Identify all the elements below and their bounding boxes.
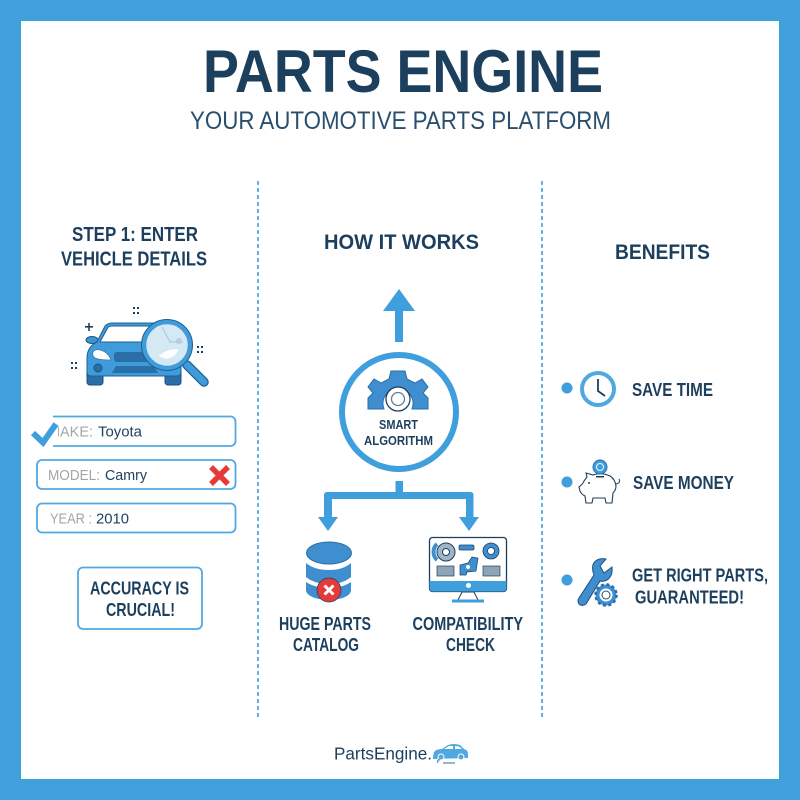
arrow: branch connector — [318, 481, 479, 531]
label: huge parts catalog: HUGE PARTS — [279, 613, 371, 634]
label: huge parts catalog — [279, 613, 371, 655]
icon: check mark — [33, 424, 56, 442]
callout: accuracy is crucial: ACCURACY IS — [90, 578, 189, 598]
subtitle: YOUR AUTOMOTIVE PARTS PLATFORM — [190, 107, 611, 135]
field: model — [37, 460, 236, 489]
benefit: save time — [562, 373, 713, 405]
smart algorithm circle: ALGORITHM — [364, 433, 433, 448]
benefit: save time: SAVE TIME — [632, 380, 713, 400]
field: year: YEAR : — [50, 510, 92, 528]
icon: gear — [368, 371, 428, 411]
benefit: save money: SAVE MONEY — [633, 473, 734, 493]
field: model: Camry — [105, 467, 147, 484]
heading: how it works: HOW IT WORKS — [324, 231, 479, 254]
icon: clock — [582, 373, 614, 405]
icon: red cross — [211, 467, 228, 484]
title: PARTS ENGINE — [203, 38, 603, 105]
field: make: MAKE: — [48, 424, 93, 440]
arrow: up — [383, 289, 415, 342]
icon: database — [306, 542, 352, 602]
icon: monitor with parts — [430, 538, 506, 602]
icon: car with magnifying glass — [71, 307, 204, 385]
heading: step 1: VEHICLE DETAILS — [61, 248, 207, 270]
field: year: 2010 — [96, 510, 129, 528]
heading: step 1 — [61, 223, 207, 270]
label: compatibility check: CHECK — [446, 634, 495, 655]
footer logo: PartsEngine. — [334, 744, 432, 764]
icon: piggy bank — [579, 460, 620, 503]
benefit: get right parts: GUARANTEED! — [635, 588, 744, 608]
benefit: save money — [562, 460, 734, 503]
benefit: get right parts — [562, 559, 768, 608]
heading: step 1: STEP 1: ENTER — [72, 223, 198, 246]
panel: how it works — [279, 231, 524, 655]
field: make — [28, 412, 236, 450]
callout: accuracy is crucial: CRUCIAL! — [106, 600, 175, 620]
icon: wrench and gear — [578, 559, 616, 606]
panel: step 1 vehicle details — [28, 223, 236, 629]
callout: accuracy is crucial — [78, 568, 202, 629]
label: compatibility check: COMPATIBILITY — [412, 613, 524, 634]
heading: benefits: BENEFITS — [615, 241, 710, 264]
field: make: Toyota — [98, 424, 143, 440]
smart algorithm circle — [342, 355, 456, 469]
panel: benefits — [562, 241, 768, 608]
field: model: MODEL: — [48, 467, 100, 484]
icon: logo car — [433, 744, 468, 763]
field: year — [37, 504, 236, 532]
smart algorithm circle: SMART — [379, 417, 418, 432]
benefit: get right parts: GET RIGHT PARTS, — [632, 566, 768, 586]
label: huge parts catalog: CATALOG — [293, 634, 359, 655]
label: compatibility check — [412, 613, 524, 655]
